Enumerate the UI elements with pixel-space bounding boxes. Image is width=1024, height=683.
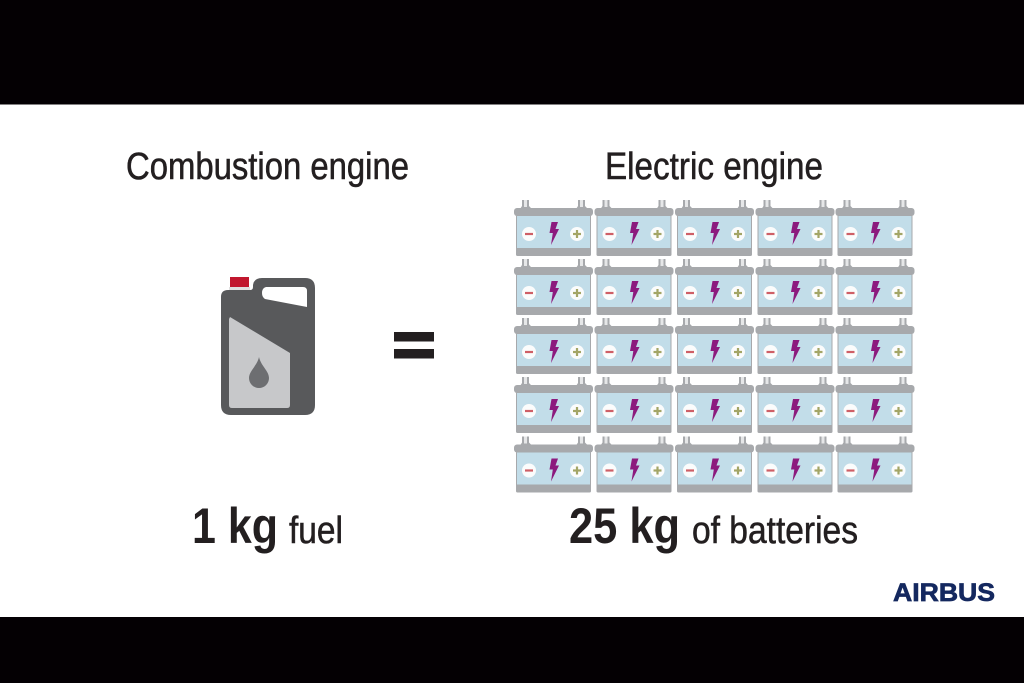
battery grid <box>514 200 914 492</box>
label: 25 kg of batteries: 25 kg <box>569 498 680 554</box>
logo: Airbus: AIRBUS <box>893 579 995 607</box>
label: 25 kg of batteries: of batteries <box>692 510 858 552</box>
label: 1 kg fuel: 1 kg <box>192 498 278 554</box>
icon: fuel canister <box>221 277 315 415</box>
label: 1 kg fuel <box>192 498 343 554</box>
equals sign <box>394 332 434 358</box>
label: 25 kg of batteries <box>569 498 858 554</box>
label: 1 kg fuel: fuel <box>289 510 343 552</box>
white panel <box>0 104 1024 617</box>
heading: combustion engine: Combustion engine <box>126 146 409 188</box>
heading: electric engine: Electric engine <box>605 146 823 188</box>
